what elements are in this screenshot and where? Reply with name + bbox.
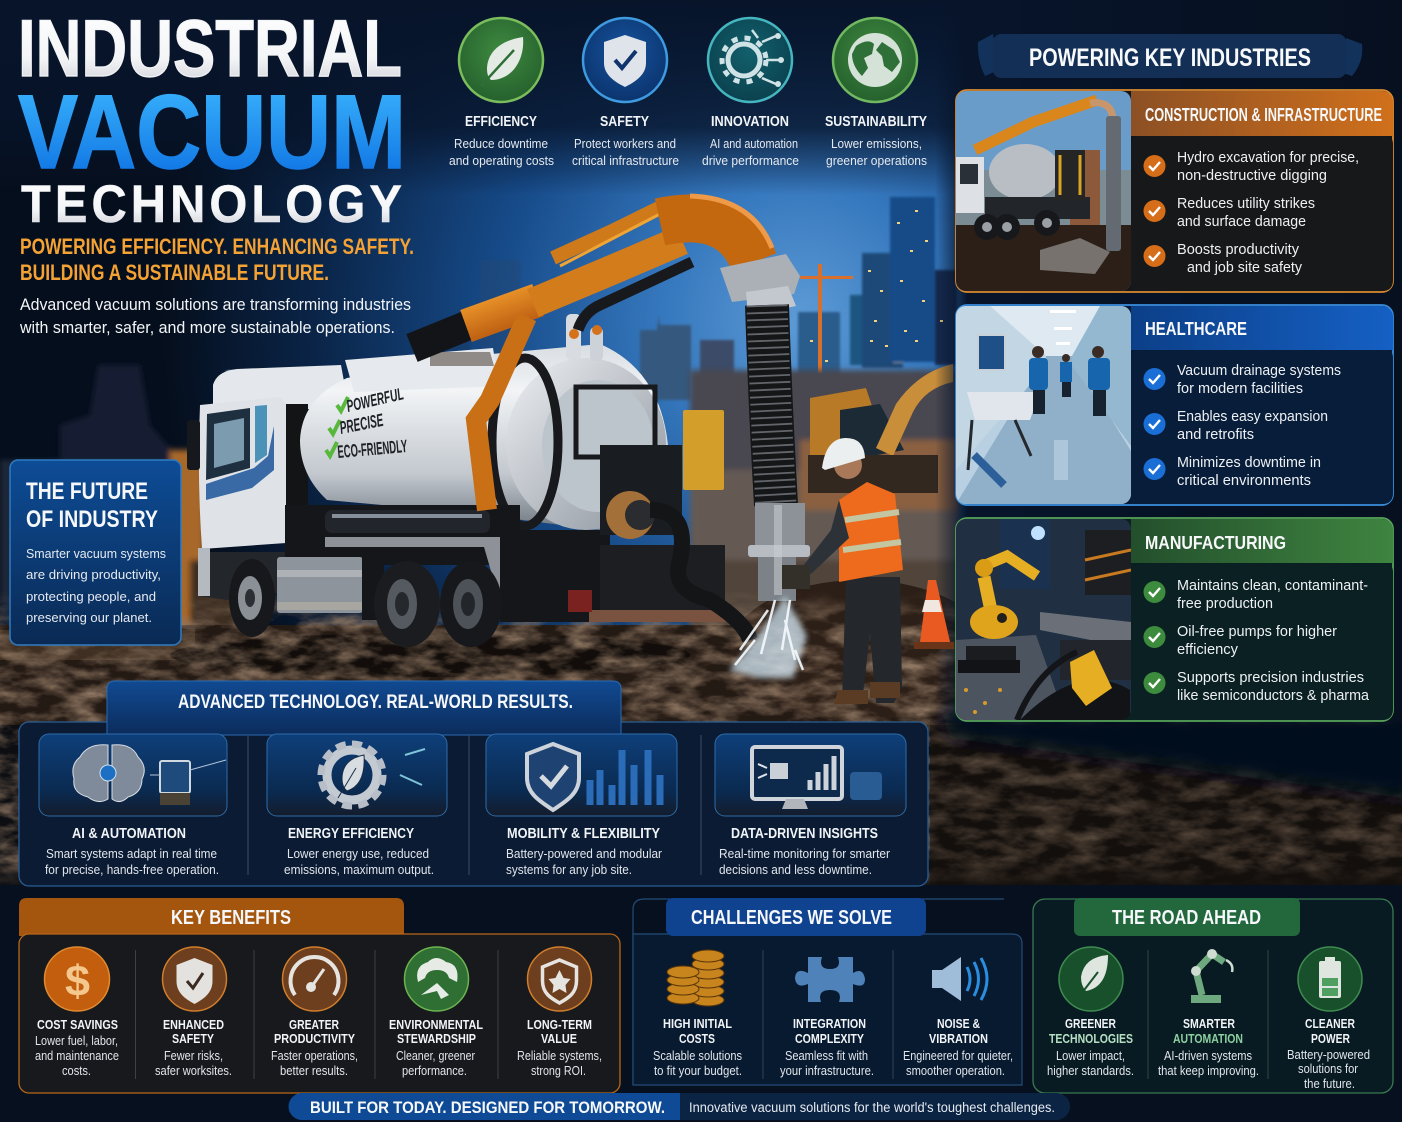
top value: innovation: AI and automation <box>710 136 798 151</box>
panel: healthcare <box>956 305 1393 505</box>
callout: the future of industry: preserving our planet. <box>26 610 152 625</box>
list panel <box>1131 350 1393 504</box>
roadmap: greener technologies <box>1047 947 1134 1078</box>
benefit: greater productivity: PRODUCTIVITY <box>274 1032 356 1046</box>
top value: innovation <box>702 18 799 168</box>
labels: Real-time monitoring for smarter <box>719 847 890 861</box>
hero scene: ground <box>0 580 1402 885</box>
benefit: greater productivity <box>271 947 358 1078</box>
labels: DATA-DRIVEN INSIGHTS <box>731 826 878 842</box>
photo: robotic factory <box>956 519 1131 720</box>
roadmap: smarter automation: AUTOMATION <box>1173 1032 1243 1046</box>
bullet text: and surface damage <box>1177 214 1306 230</box>
title: TECHNOLOGY <box>21 174 402 233</box>
tile: mobility and flexibility <box>486 734 677 816</box>
labels: for precise, hands-free operation. <box>45 863 219 877</box>
section header: powering key industries <box>978 34 1362 78</box>
benefit: enhanced safety: safer worksites. <box>155 1064 232 1078</box>
top value: sustainability: greener operations <box>826 153 927 168</box>
benefit: long-term value: Reliable systems, <box>517 1049 602 1063</box>
roadmap: cleaner power: Battery-powered <box>1287 1048 1370 1062</box>
footer banner: BUILT FOR TODAY. DESIGNED FOR TOMORROW. <box>310 1098 665 1117</box>
truck cab <box>187 365 349 600</box>
section tab: ADVANCED TECHNOLOGY. REAL-WORLD RESULTS. <box>178 692 573 713</box>
orange boom <box>412 196 800 510</box>
labels: Smart systems adapt in real time <box>46 847 217 861</box>
storage tank <box>300 314 668 530</box>
benefit: long-term value: VALUE <box>541 1032 577 1046</box>
top value: safety: critical infrastructure <box>572 153 679 168</box>
title: INDUSTRIAL <box>18 4 402 94</box>
callout: the future of industry: Smarter vacuum systems <box>26 546 166 561</box>
equipment box and pump <box>576 387 750 640</box>
panel: manufacturing: MANUFACTURING <box>1145 533 1286 553</box>
panel: the road ahead: THE ROAD AHEAD <box>1112 907 1261 929</box>
bullet text: Supports precision industries <box>1177 670 1364 686</box>
panel: challenges we solve <box>633 898 1022 1085</box>
benefit: greater productivity: Faster operations, <box>271 1049 358 1063</box>
bullet text: like semiconductors & pharma <box>1177 688 1370 704</box>
challenge: noise and vibration: VIBRATION <box>929 1032 988 1046</box>
top value: safety: Protect workers and <box>574 136 676 151</box>
hero scene: city skyline <box>0 197 960 650</box>
bullet <box>1144 245 1166 267</box>
photo: hospital corridor <box>956 306 1131 504</box>
bullet text: Maintains clean, contaminant- <box>1177 578 1368 594</box>
suction hose and pipe <box>746 286 810 601</box>
top value: efficiency <box>449 18 554 168</box>
top value: sustainability <box>825 18 927 168</box>
benefit: cost savings: $ <box>65 957 90 1006</box>
labels: AI & AUTOMATION <box>72 826 186 842</box>
benefit: enhanced safety <box>155 947 232 1078</box>
labels: MOBILITY & FLEXIBILITY <box>507 826 660 842</box>
tile: ai and automation <box>39 734 227 816</box>
benefit: greater productivity: GREATER <box>289 1018 339 1032</box>
bullet <box>1144 672 1166 694</box>
benefit: greater productivity: better results. <box>280 1064 348 1078</box>
tank labels: PRECISE <box>338 410 385 438</box>
bullet <box>1144 155 1166 177</box>
challenge: integration complexity <box>780 957 874 1078</box>
chassis and pipes <box>277 505 727 622</box>
tagline: BUILDING A SUSTAINABLE FUTURE. <box>20 260 329 285</box>
roadmap: greener technologies: Lower impact, <box>1056 1049 1125 1063</box>
bullet text: Vacuum drainage systems <box>1177 363 1341 379</box>
bullet text: Enables easy expansion <box>1177 409 1328 425</box>
icon: globe <box>833 18 917 102</box>
intro text: Advanced vacuum solutions are transforming industries <box>20 295 411 314</box>
roadmap: cleaner power: POWER <box>1311 1032 1350 1046</box>
benefit: cost savings: costs. <box>62 1064 91 1078</box>
challenge: high initial costs <box>653 950 742 1078</box>
bullet <box>1144 581 1166 603</box>
bullet text: for modern facilities <box>1177 381 1303 397</box>
bullet text: efficiency <box>1177 642 1239 658</box>
callout: the future of industry: OF INDUSTRY <box>26 506 158 533</box>
tagline <box>20 234 414 285</box>
benefit: cost savings <box>35 947 119 1078</box>
benefit: enhanced safety: SAFETY <box>172 1032 215 1046</box>
callout: the future of industry: THE FUTURE <box>26 478 148 505</box>
panel: construction and infrastructure <box>956 90 1393 292</box>
roadmap: cleaner power: CLEANER <box>1305 1017 1355 1031</box>
hero: vacuum truck <box>187 196 810 647</box>
challenge: noise and vibration: NOISE & <box>937 1017 980 1031</box>
challenge: high initial costs: Scalable solutions <box>653 1049 742 1063</box>
benefit: environmental stewardship: ENVIRONMENTAL <box>389 1018 483 1032</box>
bullet text: critical environments <box>1177 473 1311 489</box>
footer banner: Innovative vacuum solutions for the world's toughest challenges. <box>689 1100 1055 1115</box>
header band <box>1131 91 1393 136</box>
hero: worker <box>782 438 903 704</box>
bullet text: Minimizes downtime in <box>1177 455 1321 471</box>
right column backdrop <box>935 0 1402 722</box>
panel: challenges we solve: CHALLENGES WE SOLVE <box>691 907 892 929</box>
bullet text <box>1177 578 1370 704</box>
top value: innovation: INNOVATION <box>711 114 789 130</box>
challenge: integration complexity: COMPLEXITY <box>795 1032 865 1046</box>
bullet text: Oil-free pumps for higher <box>1177 624 1337 640</box>
bullet <box>1144 413 1166 435</box>
tank labels: ECO-FRIENDLY <box>337 436 408 462</box>
roadmap: cleaner power: solutions for <box>1298 1062 1358 1076</box>
callout: the future of industry <box>10 460 181 645</box>
bullet text <box>1177 363 1341 489</box>
labels: ENERGY EFFICIENCY <box>288 826 414 842</box>
benefit: enhanced safety: Fewer risks, <box>164 1049 223 1063</box>
section tab <box>107 681 621 735</box>
benefit: cost savings: and maintenance <box>35 1049 119 1063</box>
bullet text: and job site safety <box>1187 260 1303 276</box>
bullet text <box>1177 150 1359 276</box>
top value: efficiency: Reduce downtime <box>454 136 548 151</box>
roadmap: smarter automation: SMARTER <box>1183 1017 1235 1031</box>
challenge: noise and vibration <box>903 957 1013 1078</box>
benefit: long-term value <box>517 947 602 1078</box>
title: VACUUM <box>18 74 406 191</box>
top value: safety <box>572 18 679 168</box>
list panel <box>1131 564 1393 720</box>
roadmap: cleaner power <box>1287 947 1370 1091</box>
roadmap: greener technologies: TECHNOLOGIES <box>1049 1032 1133 1046</box>
truck wheels <box>229 559 502 647</box>
title <box>18 4 406 233</box>
icon: leaf <box>459 18 543 102</box>
benefit: environmental stewardship: STEWARDSHIP <box>397 1032 476 1046</box>
benefit: enhanced safety: ENHANCED <box>163 1018 224 1032</box>
labels: Lower energy use, reduced <box>287 847 429 861</box>
labels: Battery-powered and modular <box>506 847 662 861</box>
header band <box>1131 519 1393 563</box>
intro text: with smarter, safer, and more sustainable operations. <box>19 318 395 337</box>
roadmap: cleaner power: the future. <box>1304 1077 1355 1091</box>
labels: systems for any job site. <box>506 863 632 877</box>
roadmap: smarter automation: that keep improving. <box>1158 1064 1259 1078</box>
bullet text: and retrofits <box>1177 427 1254 443</box>
bullet text: Boosts productivity <box>1177 242 1300 258</box>
panel: key benefits: KEY BENEFITS <box>171 907 291 929</box>
header band <box>1131 306 1393 350</box>
callout: the future of industry: are driving productivity, <box>26 567 161 582</box>
panel: healthcare: HEALTHCARE <box>1145 319 1247 339</box>
top value: efficiency: and operating costs <box>449 153 554 168</box>
challenge: high initial costs: to fit your budget. <box>654 1064 742 1078</box>
list panel <box>1131 136 1393 291</box>
hero scene: excavator background <box>808 364 953 493</box>
tank labels: POWERFUL <box>345 384 405 416</box>
top value: sustainability: SUSTAINABILITY <box>825 114 927 130</box>
bullet <box>1144 200 1166 222</box>
challenge: high initial costs: COSTS <box>679 1032 715 1046</box>
tile: energy efficiency <box>267 734 447 816</box>
roadmap: greener technologies: higher standards. <box>1047 1064 1134 1078</box>
benefit: long-term value: LONG-TERM <box>527 1018 592 1032</box>
top value: efficiency: EFFICIENCY <box>465 114 537 130</box>
bullet <box>1144 458 1166 480</box>
panel: the road ahead <box>1033 898 1393 1093</box>
callout: the future of industry: protecting people, and <box>26 589 156 604</box>
hero: water splash <box>729 596 807 678</box>
labels <box>45 826 890 877</box>
benefit: environmental stewardship: performance. <box>402 1064 467 1078</box>
labels: emissions, maximum output. <box>284 863 434 877</box>
photo: construction site <box>956 91 1131 291</box>
bullet text: non-destructive digging <box>1177 168 1327 184</box>
benefit: long-term value: strong ROI. <box>531 1064 586 1078</box>
challenge: integration complexity: Seamless fit with <box>785 1049 868 1063</box>
challenge: integration complexity: INTEGRATION <box>793 1017 866 1031</box>
panel: manufacturing <box>956 518 1393 721</box>
intro text <box>19 295 411 337</box>
roadmap: greener technologies: GREENER <box>1065 1017 1116 1031</box>
benefit: cost savings: Lower fuel, labor, <box>35 1034 118 1048</box>
panel: advanced technology <box>19 681 928 886</box>
tagline: POWERING EFFICIENCY. ENHANCING SAFETY. <box>20 234 414 259</box>
benefit: cost savings: COST SAVINGS <box>37 1018 118 1032</box>
hero: traffic cone <box>914 580 954 649</box>
tank labels <box>326 384 408 462</box>
labels: decisions and less downtime. <box>719 863 872 877</box>
icon: shield <box>583 18 667 102</box>
challenge: noise and vibration: smoother operation. <box>906 1064 1005 1078</box>
bullet text: Hydro excavation for precise, <box>1177 150 1359 166</box>
challenge: high initial costs: HIGH INITIAL <box>663 1017 732 1031</box>
challenge: noise and vibration: Engineered for quieter, <box>903 1049 1013 1063</box>
bullet <box>1144 626 1166 648</box>
tile: data-driven insights <box>715 734 906 816</box>
bullet text: free production <box>1177 596 1273 612</box>
bullet <box>1144 368 1166 390</box>
bullet text: Reduces utility strikes <box>1177 196 1315 212</box>
section header: powering key industries: POWERING KEY INDUSTRIES <box>1029 44 1311 72</box>
top value: innovation: drive performance <box>702 153 799 168</box>
challenge: integration complexity: your infrastructure. <box>780 1064 874 1078</box>
footer banner <box>288 1093 1070 1120</box>
panel: key benefits <box>19 898 620 1093</box>
top value: sustainability: Lower emissions, <box>831 136 922 151</box>
roadmap: smarter automation: AI-driven systems <box>1164 1049 1252 1063</box>
roadmap: smarter automation <box>1158 949 1259 1078</box>
benefit: environmental stewardship <box>389 947 483 1078</box>
benefit: environmental stewardship: Cleaner, greener <box>396 1049 475 1063</box>
top value: safety: SAFETY <box>600 114 649 130</box>
icon: gear circuit <box>708 18 792 102</box>
